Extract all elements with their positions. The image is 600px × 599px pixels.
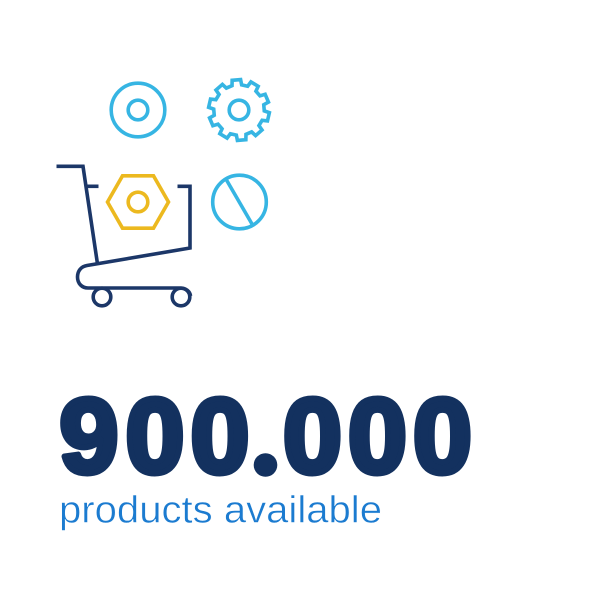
icon: hex nut	[108, 176, 168, 228]
caption: products available	[59, 490, 382, 532]
icon: slotted disc	[213, 175, 266, 229]
headline number: 900 .000	[60, 378, 472, 496]
icon: washer	[111, 83, 165, 137]
icon: gear	[209, 80, 269, 140]
icon: shopping cart	[56, 166, 190, 306]
